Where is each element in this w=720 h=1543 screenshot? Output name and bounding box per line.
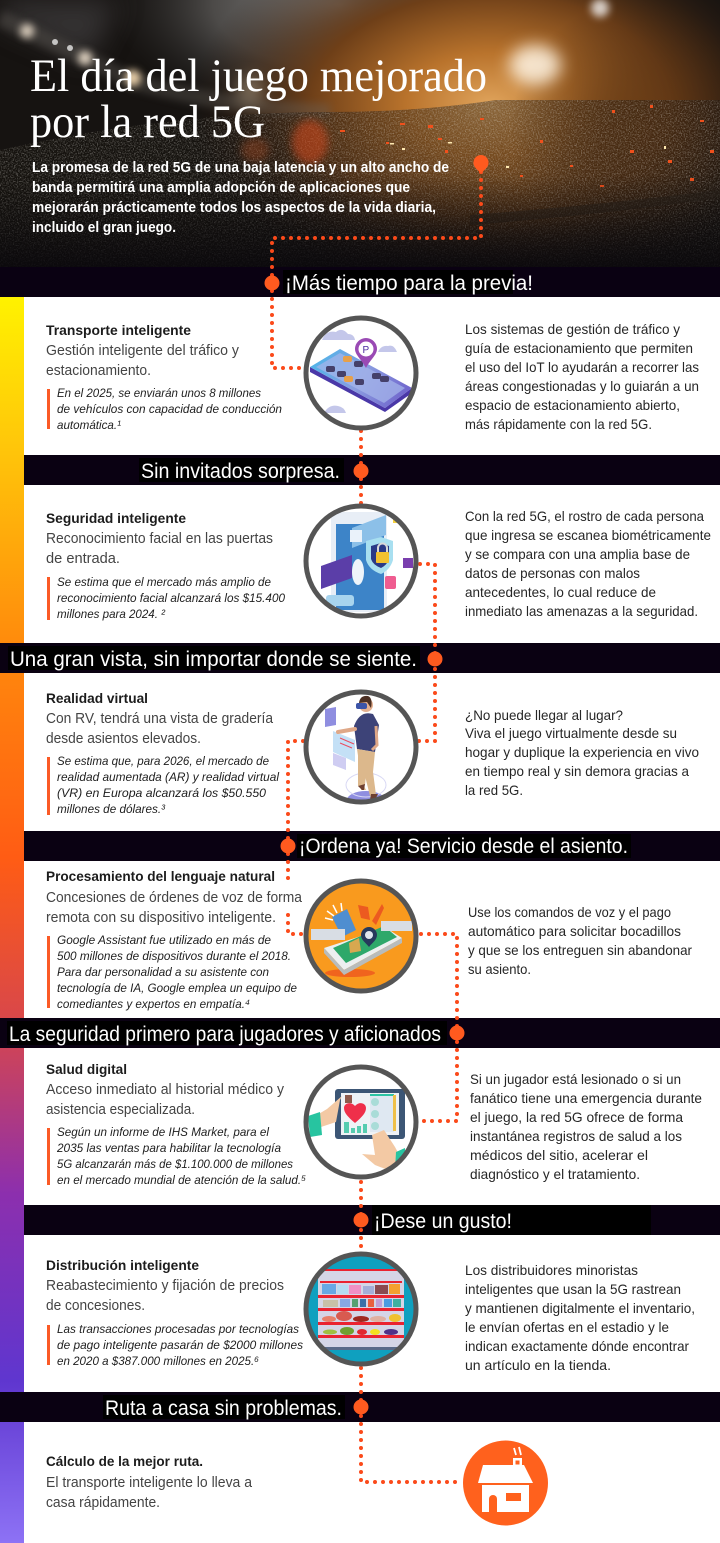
statistic note: comediantes y expertos en empatía.⁴: [57, 997, 250, 1011]
icon: house: [463, 1440, 548, 1526]
description: Los distribuidores minoristas: [465, 1262, 638, 1278]
description: y que se los entreguen sin abandonar: [468, 942, 692, 958]
section band: ordena ya: [24, 831, 720, 861]
description: le envían ofertas en el estadio y le: [465, 1319, 669, 1335]
statistic note: (VR) en Europa alcanzará los $50.550: [57, 786, 266, 800]
heading and subtitle: Con RV, tendrá una vista de gradería: [46, 710, 274, 727]
statistic note: tecnología de IA, Google emplea un equipo de: [57, 981, 297, 995]
panel: cálculo de la mejor ruta: casa rápidamente.: [46, 1494, 160, 1511]
icon: parking phone: [306, 318, 416, 428]
heading and subtitle: Concesiones de órdenes de voz de forma: [46, 889, 303, 906]
description: áreas congestionadas y lo guiarán a un: [465, 378, 699, 394]
description: guía de estacionamiento que permiten: [465, 340, 693, 356]
description: Use los comandos de voz y el pago: [468, 904, 671, 920]
section band: más tiempo para la previa: [0, 267, 720, 297]
statistic note: de vehículos con capacidad de conducción: [57, 402, 282, 416]
section band: dese un gusto: [24, 1205, 720, 1235]
statistic note: Para dar personalidad a su asistente con: [57, 965, 269, 979]
section band: una gran vista: Una gran vista, sin importar donde se siente.: [10, 648, 417, 671]
section band: ruta a casa: [0, 1392, 720, 1422]
section band: la seguridad primero: La seguridad primero para jugadores y aficionados: [9, 1023, 441, 1046]
heading and subtitle: Salud digital: [46, 1061, 127, 1077]
heading and subtitle: Seguridad inteligente: [46, 510, 186, 526]
description: el uso del IoT lo ayudarán a recorrer las: [465, 359, 699, 375]
heading and subtitle: Reabastecimiento y fijación de precios: [46, 1277, 284, 1294]
title: El día del juego mejorado: [30, 50, 487, 102]
heading and subtitle: Gestión inteligente del tráfico y: [46, 342, 239, 359]
description: Si un jugador está lesionado o si un: [470, 1071, 681, 1087]
statistic note: [47, 386, 282, 432]
heading and subtitle: de concesiones.: [46, 1297, 145, 1314]
description: la red 5G.: [465, 782, 523, 798]
route nodes: [264, 155, 489, 1414]
description: fanático tiene una emergencia durante: [470, 1090, 702, 1106]
statistic note: 500 millones de dispositivos durante el 2018.: [57, 949, 291, 963]
heading and subtitle: [46, 1257, 284, 1314]
statistic note: en el mercado mundial de atención de la salud.⁵: [57, 1173, 306, 1187]
description: inmediato las amenazas a la seguridad.: [465, 603, 698, 619]
statistic note: millones para 2024. ²: [57, 607, 166, 621]
description: y mantienen digitalmente el inventario,: [465, 1300, 695, 1316]
description: inteligentes que usan la 5G rastrean: [465, 1281, 681, 1297]
heading and subtitle: [46, 868, 303, 926]
statistic note: [47, 575, 285, 621]
statistic note: [47, 933, 297, 1011]
title: por la red 5G: [30, 96, 265, 148]
intro text: La promesa de la red 5G de una baja latencia y un alto ancho de: [32, 159, 449, 176]
title: [30, 50, 487, 148]
heading and subtitle: estacionamiento.: [46, 362, 151, 379]
panel: cálculo de la mejor ruta: Cálculo de la mejor ruta.: [46, 1453, 203, 1469]
statistic note: En el 2025, se enviarán unos 8 millones: [57, 386, 261, 400]
description: y se compara con una amplia base de: [465, 546, 690, 562]
statistic note: Google Assistant fue utilizado en más de: [57, 933, 271, 947]
side colour gradient bar: [0, 297, 24, 1543]
statistic note: Se estima que el mercado más amplio de: [57, 575, 271, 589]
statistic note: [47, 1125, 306, 1187]
heading and subtitle: [46, 510, 273, 567]
panel: realidad virtual: [46, 690, 699, 816]
section band: una gran vista: [0, 643, 720, 673]
panel: procesamiento del lenguaje natural: [46, 868, 692, 1011]
heading and subtitle: Procesamiento del lenguaje natural: [46, 868, 275, 884]
description: [470, 1071, 702, 1182]
description: antecedentes, lo cual reduce de: [465, 584, 656, 600]
description: diagnóstico y el tratamiento.: [470, 1166, 640, 1182]
dotted route line: [272, 172, 481, 1482]
description: Con la red 5G, el rostro de cada persona: [465, 508, 704, 524]
description: espacio de estacionamiento abierto,: [465, 397, 680, 413]
intro text: mejorarán prácticamente todos los aspectos de la vida diaria,: [32, 199, 436, 216]
heading and subtitle: Realidad virtual: [46, 690, 148, 706]
hero: stadium photo background: [0, 0, 720, 267]
description: indican exactamente dónde encontrar: [465, 1338, 689, 1354]
section band: ordena ya: ¡Ordena ya! Servicio desde el asiento.: [299, 835, 628, 858]
description: Los sistemas de gestión de tráfico y: [465, 321, 680, 337]
panel: seguridad inteligente: [46, 508, 711, 621]
statistic note: 2035 las ventas para habilitar la tecnología: [56, 1141, 281, 1155]
statistic note: 5G alcanzarán más de $1.100.000 de millones: [57, 1157, 293, 1171]
description: un artículo en la tienda.: [465, 1357, 611, 1373]
heading and subtitle: Reconocimiento facial en las puertas: [46, 530, 273, 547]
heading and subtitle: remota con su dispositivo inteligente.: [46, 909, 276, 926]
section band: la seguridad primero: [0, 1018, 720, 1048]
statistic note: [47, 754, 279, 816]
statistic note: reconocimiento facial alcanzará los $15.400: [57, 591, 285, 605]
icon: supermarket shelves: [306, 1254, 416, 1364]
section band: dese un gusto: ¡Dese un gusto!: [374, 1210, 512, 1233]
heading and subtitle: [46, 690, 274, 747]
icon: voice order phone: [306, 881, 416, 991]
panel: cálculo de la mejor ruta: [46, 1453, 253, 1511]
statistic note: en 2020 a $387.000 millones en 2025.⁶: [57, 1354, 259, 1368]
panel: transporte inteligente: [46, 321, 699, 432]
description: más rápidamente con la red 5G.: [465, 416, 652, 432]
statistic note: Las transacciones procesadas por tecnologías: [57, 1322, 299, 1336]
statistic note: Según un informe de IHS Market, para el: [57, 1125, 269, 1139]
panel: cálculo de la mejor ruta: El transporte inteligente lo lleva a: [46, 1474, 253, 1491]
intro text: banda permitirá una amplia adopción de aplicaciones que: [32, 179, 410, 196]
description: [468, 904, 692, 977]
heading and subtitle: asistencia especializada.: [46, 1101, 195, 1118]
section band: ruta a casa: Ruta a casa sin problemas.: [105, 1397, 342, 1420]
statistic note: automática.¹: [57, 418, 121, 432]
icon: health tablet: [306, 1067, 416, 1177]
icon: parking phone: P: [362, 345, 370, 356]
description: [465, 321, 699, 432]
heading and subtitle: Transporte inteligente: [46, 322, 191, 338]
heading and subtitle: Acceso inmediato al historial médico y: [46, 1081, 284, 1098]
statistic note: Se estima que, para 2026, el mercado de: [57, 754, 269, 768]
panel: distribución inteligente: [46, 1257, 695, 1373]
panel: salud digital: [46, 1061, 702, 1187]
description: [465, 508, 711, 619]
description: [465, 707, 699, 798]
heading and subtitle: Distribución inteligente: [46, 1257, 199, 1273]
section band: sin invitados sorpresa: [24, 455, 720, 485]
icon: security shield: [306, 506, 416, 616]
statistic note: millones de dólares.³: [57, 802, 166, 816]
heading and subtitle: de entrada.: [46, 550, 120, 567]
description: que ingresa se escanea biométricamente: [465, 527, 711, 543]
description: el juego, la red 5G ofrece de forma: [470, 1109, 683, 1125]
description: médicos del sitio, acelerar el: [470, 1147, 648, 1163]
description: automático para solicitar bocadillos: [468, 923, 681, 939]
intro text: incluido el gran juego.: [32, 219, 176, 236]
section band: más tiempo para la previa: ¡Más tiempo para la previa!: [285, 272, 533, 295]
heading and subtitle: [46, 1061, 284, 1118]
description: ¿No puede llegar al lugar?: [465, 707, 623, 723]
statistic note: realidad aumentada (AR) y realidad virtual: [57, 770, 279, 784]
heading and subtitle: desde asientos elevados.: [46, 730, 201, 747]
statistic note: de pago inteligente pasarán de $2000 millones: [57, 1338, 303, 1352]
description: instantánea registros de salud a los: [470, 1128, 682, 1144]
icon: virtual reality user: [306, 692, 416, 809]
description: datos de personas con malos: [465, 565, 640, 581]
description: en tiempo real y sin demora gracias a: [465, 763, 689, 779]
description: Viva el juego virtualmente desde su: [465, 725, 677, 741]
intro text: [32, 159, 449, 236]
description: su asiento.: [468, 961, 531, 977]
section band: sin invitados sorpresa: Sin invitados sorpresa.: [141, 460, 340, 483]
statistic note: [47, 1322, 303, 1368]
description: [465, 1262, 695, 1373]
description: hogar y duplique la experiencia en vivo: [465, 744, 699, 760]
heading and subtitle: [46, 322, 239, 379]
